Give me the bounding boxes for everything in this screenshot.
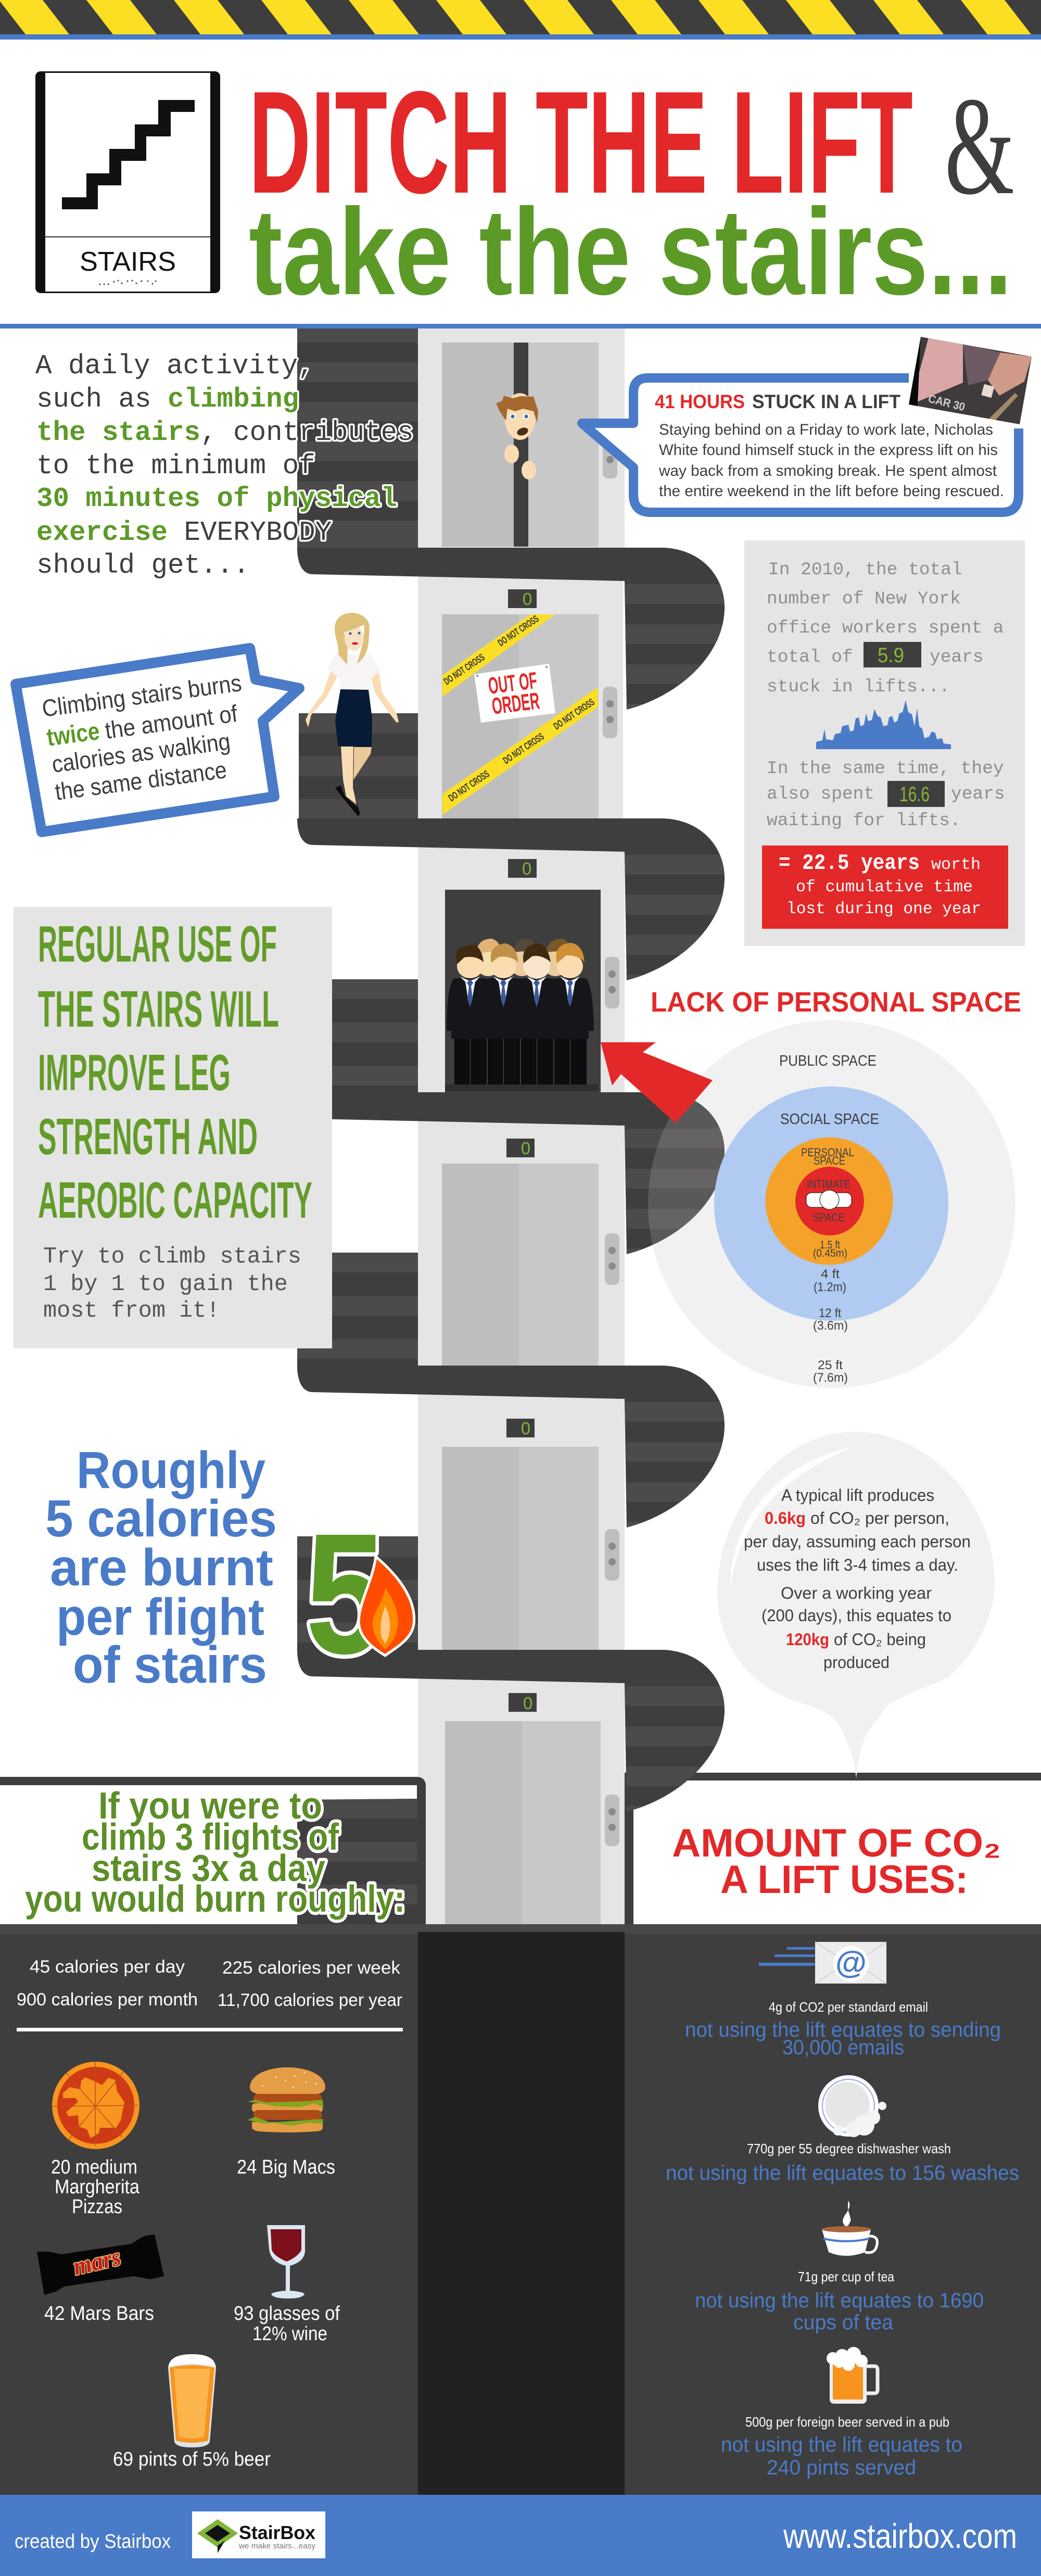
callout: 41 hours stuck in a lift: the entire weekend in the lift before being rescued. (659, 483, 1004, 500)
caution tape: DO NOT CROSS (447, 768, 491, 804)
footer (0, 2495, 1041, 2576)
icon: crowd of office workers (447, 939, 594, 1084)
panel: climb 3 flights: you would burn roughly: (25, 1878, 405, 1920)
callout: typical lift CO2 bubble: (200 days), this equates to (761, 1606, 951, 1625)
lift 1: man stuck in doors (418, 329, 625, 550)
callout: twice the calories: calories as walking (50, 727, 232, 778)
out of order sign (474, 664, 555, 723)
panel: regular use of the stairs: IMPROVE LEG (38, 1044, 231, 1101)
text: food equivalents (44, 2156, 340, 2470)
callout: 41 hours stuck in a lift: White found himself stuck in the express lift on his (659, 441, 998, 459)
text: food equivalents: 12% wine (252, 2323, 327, 2345)
callout: typical lift CO2 bubble: Over a working year (781, 1584, 932, 1602)
floor display: 0 (523, 589, 532, 609)
callout: typical lift CO2 bubble: per day, assuming each person (744, 1532, 971, 1551)
icon: stairs sign (35, 71, 220, 293)
personal space chart: 4 ft (821, 1267, 840, 1281)
panel: New York lift statistics: stuck in lifts... (767, 677, 950, 697)
panel: New York lift statistics: years (930, 647, 984, 667)
panel: regular use of the stairs: AEROBIC CAPACITY (38, 1171, 312, 1229)
personal space chart: SPACE (813, 1211, 845, 1224)
public space circle (648, 1020, 1015, 1388)
panel: New York lift statistics: In the same time, they (767, 759, 1004, 779)
photo: lift cctv still (903, 333, 1032, 424)
text: email equivalent: not using the lift equates to sending (685, 2018, 1001, 2041)
icon: burger (248, 2067, 325, 2132)
panel: amount of CO2 heading: AMOUNT OF CO₂ (672, 1821, 1001, 1865)
panel: intro text: 30 minutes of physical (36, 483, 397, 514)
digital counter 5.9 (864, 642, 921, 667)
lift 4 (418, 1117, 625, 1366)
out of order sign: ORDER (490, 687, 541, 719)
icon: mars bar (37, 2234, 164, 2295)
panel: intro text: should get... (36, 550, 250, 581)
text: dishwasher equivalent (666, 2141, 1019, 2184)
icon: mars bar: mars (71, 2243, 123, 2281)
lift 6 (418, 1674, 625, 1924)
panel: regular use of the stairs (14, 907, 332, 1348)
callout: twice the calories (16, 648, 299, 832)
stair strips behind lifts (297, 329, 420, 1650)
spiral stairs (297, 548, 729, 1827)
title (249, 61, 1014, 321)
callout: 22.5 years lost: lost during one year (786, 900, 981, 918)
callout: 41 hours stuck in a lift: 41 HOURS (655, 391, 745, 412)
icon: stuck man (496, 393, 538, 479)
lift 2: out of order (418, 573, 623, 818)
personal space chart: 1.5 ft (820, 1239, 840, 1251)
photo: lift cctv still: CAR 30 (927, 392, 967, 413)
heading: roughly 5 calories: per flight (56, 1588, 264, 1646)
callout: 41 hours stuck in a lift: STUCK IN A LIFT (752, 391, 900, 412)
personal space chart: (1.2m) (814, 1280, 846, 1294)
panel: New York lift statistics (744, 540, 1025, 946)
hazard stripe header (0, 0, 1041, 40)
text: tea equivalent: 71g per cup of tea (798, 2269, 894, 2284)
panel: intro text: A daily activity, (35, 350, 314, 382)
callout: 41 hours stuck in a lift: Staying behind on a Friday to work late, Nicholas (659, 421, 993, 438)
icon: cup of tea (822, 2201, 877, 2256)
callout: typical lift CO2 bubble: of CO₂ per person, (810, 1509, 949, 1527)
personal space chart: 12 ft (819, 1306, 841, 1320)
text: email equivalent: 4g of CO2 per standard email (769, 1999, 928, 2015)
icon: wine glass (267, 2225, 305, 2299)
panel: New York lift statistics: total of (767, 647, 853, 667)
text: beer equivalent (721, 2414, 962, 2479)
text: food equivalents: Margherita (55, 2176, 140, 2198)
floor display: 0 (523, 1694, 532, 1713)
personal space chart: (7.6m) (813, 1371, 848, 1385)
calorie totals: 900 calories per month (17, 1990, 198, 2010)
text: food equivalents: 42 Mars Bars (44, 2303, 154, 2325)
digital counter 16.6 (887, 781, 945, 807)
panel: climb 3 flights: climb 3 flights of (82, 1816, 339, 1858)
personal space chart: SOCIAL SPACE (780, 1111, 879, 1128)
callout: twice the calories: the same distance (54, 756, 228, 805)
text: beer equivalent: not using the lift equates to (721, 2433, 962, 2456)
text: email equivalent: 30,000 emails (782, 2036, 904, 2059)
callout: 22.5 years lost: = 22.5 years (779, 851, 920, 876)
panel: regular use of the stairs: STRENGTH AND (38, 1108, 258, 1165)
lift 3: crowded lift (418, 843, 625, 1095)
callout: 22.5 years lost (762, 845, 1008, 929)
icon: woman sitting on stairs (306, 613, 399, 816)
personal space chart: (3.6m) (813, 1319, 848, 1333)
arrow: to crowded lift (601, 1042, 713, 1123)
text: dishwasher equivalent: 770g per 55 degree dishwasher wash (747, 2141, 951, 2156)
icon: New York skyline (816, 700, 951, 749)
calorie totals (17, 1957, 402, 2010)
panel: amount of CO2 heading (625, 1773, 1041, 1924)
calorie totals: 11,700 calories per year (218, 1990, 402, 2010)
icon: email (759, 1942, 886, 1984)
callout: typical lift CO2 bubble: 0.6kg (765, 1509, 806, 1527)
text: tea equivalent: cups of tea (793, 2311, 894, 2334)
text: dishwasher equivalent: not using the lift equates to 156 washes (666, 2162, 1019, 2184)
heading: roughly 5 calories: are burnt (50, 1538, 273, 1597)
caution tape: DO NOT CROSS (442, 652, 487, 687)
callout: twice the calories: Climbing stairs burns (41, 669, 243, 722)
digital counter 5.9: 5.9 (878, 644, 904, 667)
icon: email: @ (835, 1945, 867, 1980)
panel: dark lower section (0, 1924, 1041, 2495)
heading: roughly 5 calories: 5 calories (45, 1489, 277, 1548)
personal space chart (714, 1053, 948, 1385)
logo: StairBox: we make stairs...easy (238, 2542, 316, 2550)
panel: New York lift statistics: also spent (767, 784, 874, 804)
panel: amount of CO2 heading: A LIFT USES: (720, 1858, 968, 1902)
callout: typical lift CO2 bubble: A typical lift produces (781, 1486, 934, 1505)
panel: New York lift statistics: In 2010, the total (768, 560, 962, 580)
text: food equivalents: 69 pints of 5% beer (113, 2448, 271, 2470)
floor display (508, 859, 537, 878)
panel: intro text: the stairs, contributes (36, 417, 414, 448)
icon: big 5 with flame: 5 (306, 1497, 385, 1689)
text: tea equivalent (695, 2269, 984, 2334)
panel: New York lift statistics: years (951, 784, 1005, 804)
text: beer equivalent: 240 pints served (767, 2456, 916, 2479)
panel: intro text: exercise EVERYBODY (36, 517, 332, 548)
heading: roughly 5 calories: of stairs (73, 1636, 267, 1694)
personal space chart: PERSONAL (801, 1146, 854, 1159)
panel: regular use of the stairs: REGULAR USE OF (38, 915, 277, 973)
floor display: 0 (521, 1419, 530, 1438)
panel: regular use of the stairs: most from it! (43, 1298, 220, 1324)
calorie totals: 45 calories per day (30, 1957, 185, 1977)
callout: typical lift CO2 bubble: 120kg (786, 1630, 829, 1649)
callout: 22.5 years lost: worth (931, 856, 981, 874)
heading: lack of personal space: LACK OF PERSONAL SPACE (651, 987, 1021, 1018)
floor display (506, 1139, 535, 1158)
panel: regular use of the stairs: Try to climb stairs (43, 1244, 301, 1270)
callout: twice the calories: twice (45, 717, 101, 752)
floor display: 0 (522, 859, 531, 878)
text: beer equivalent: 500g per foreign beer served in a pub (745, 2414, 949, 2430)
floor display (508, 589, 537, 609)
caution tape: DO NOT CROSS (552, 697, 596, 732)
panel: climb 3 flights: If you were to (98, 1785, 322, 1827)
callout: typical lift CO2 bubble: of CO₂ being (834, 1630, 926, 1649)
panel: intro text (35, 350, 414, 581)
calorie totals: 225 calories per week (222, 1958, 401, 1978)
caution tape: DO NOT CROSS (501, 731, 546, 766)
panel: intro text: to the minimum of (36, 450, 315, 482)
text: food equivalents: 24 Big Macs (237, 2156, 335, 2178)
icon: stairs sign: STAIRS (80, 247, 176, 277)
text: food equivalents: 20 medium (51, 2156, 137, 2178)
text: food equivalents: 93 glasses of (234, 2303, 340, 2325)
callout: twice the calories: the amount of (104, 700, 239, 744)
callout: typical lift CO2 bubble: produced (823, 1653, 890, 1672)
panel: climb 3 flights (0, 1777, 426, 1924)
logo: StairBox (192, 2511, 325, 2558)
panel: New York lift statistics: waiting for lifts. (767, 811, 961, 831)
callout: 41 hours stuck in a lift: way back from a smoking break. He spent almost (658, 462, 997, 479)
heading: roughly 5 calories: Roughly (77, 1441, 265, 1499)
panel: climb 3 flights: stairs 3x a day (92, 1848, 325, 1889)
text: tea equivalent: not using the lift equates to 1690 (695, 2289, 984, 2312)
personal space chart: (0.45m) (813, 1247, 847, 1259)
digital counter 16.6: 16.6 (899, 783, 930, 806)
out of order sign: OUT OF (487, 667, 539, 699)
panel: regular use of the stairs: THE STAIRS WILL (38, 980, 279, 1038)
panel: regular use of the stairs: 1 by 1 to gain the (43, 1272, 288, 1297)
floor display (506, 1419, 535, 1438)
heading: roughly 5 calories (45, 1441, 277, 1694)
text: email equivalent (685, 1999, 1001, 2059)
personal space chart: 25 ft (818, 1358, 843, 1372)
personal space chart: PUBLIC SPACE (779, 1053, 877, 1069)
panel: New York lift statistics: office workers spent a (767, 618, 1004, 638)
callout: typical lift CO2 bubble: uses the lift 3-4 times a day. (757, 1556, 958, 1574)
footer: created by Stairbox (15, 2531, 171, 2553)
callout: 41 hours stuck in a lift (582, 333, 1032, 512)
callout: typical lift CO2 bubble (717, 1432, 995, 1778)
personal space chart: INTIMATE (807, 1178, 850, 1191)
icon: beer mug (827, 2347, 878, 2404)
lift 5 (418, 1390, 625, 1650)
icon: dish plate (818, 2075, 886, 2137)
icon: pint of beer (168, 2354, 216, 2447)
panel: intro text: such as climbing (36, 384, 299, 415)
icon: pizza (52, 2062, 139, 2149)
personal space chart: SPACE (814, 1154, 845, 1167)
text: food equivalents: Pizzas (72, 2196, 122, 2218)
floor display: 0 (521, 1139, 530, 1158)
caution tape (442, 613, 598, 815)
caution tape: DO NOT CROSS (496, 613, 541, 649)
callout: 22.5 years lost: of cumulative time (796, 878, 973, 896)
floor display (509, 1693, 537, 1713)
panel: New York lift statistics: number of New York (767, 589, 961, 609)
logo: StairBox: StairBox (239, 2522, 315, 2543)
